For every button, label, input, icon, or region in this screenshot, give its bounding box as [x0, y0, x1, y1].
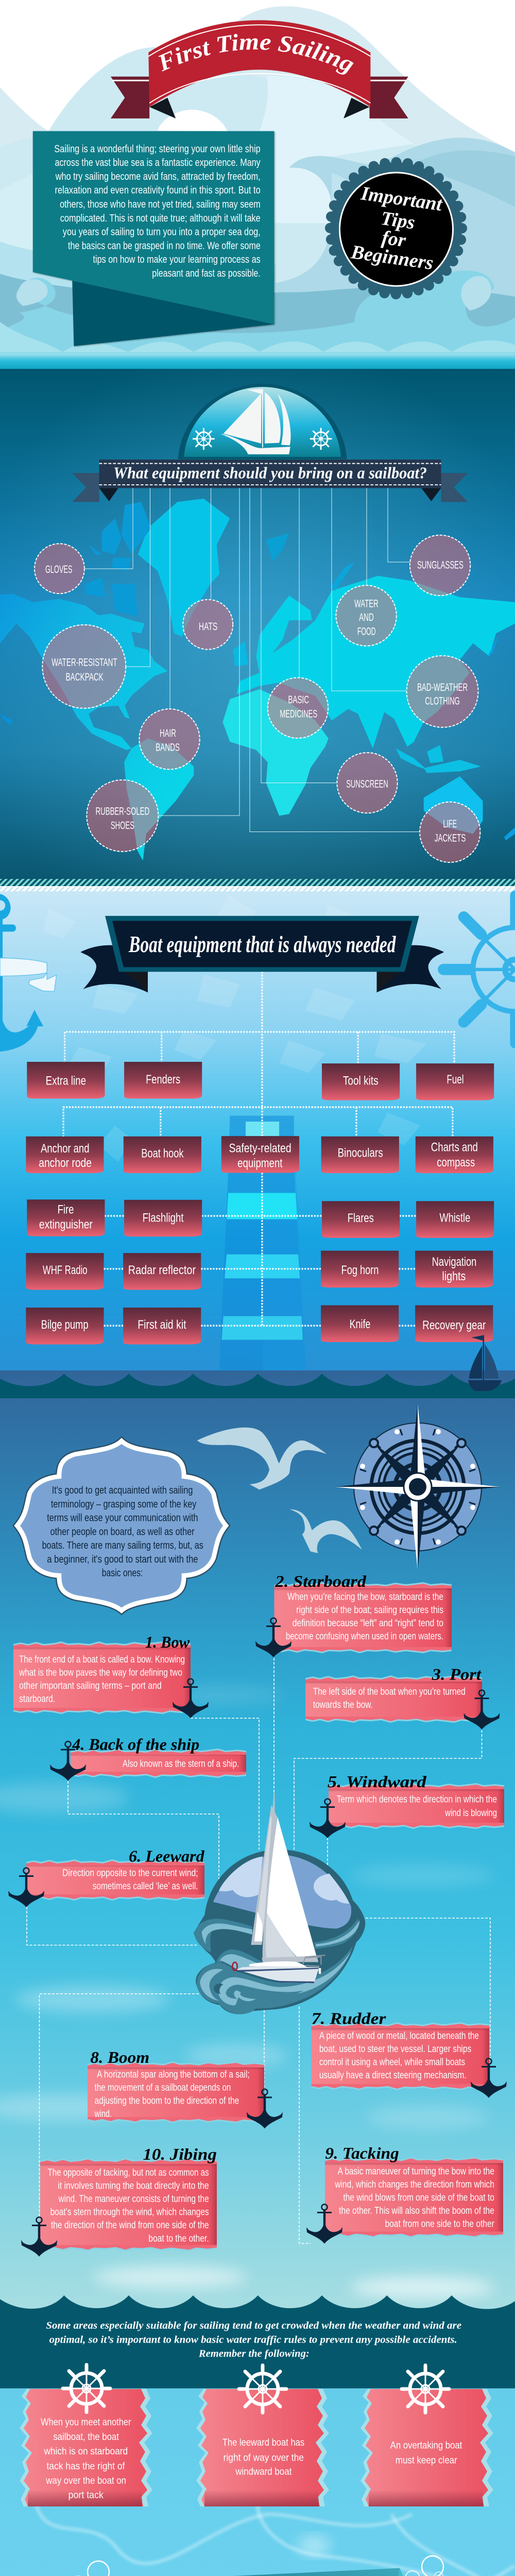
box: boat hook [124, 1137, 201, 1173]
label: sunscreen [337, 753, 398, 813]
intro bubble: terminology: basic ones: [102, 1568, 143, 1579]
connector lines [84, 488, 419, 832]
term card 10: jibing: it involves turning the boat directly into the [58, 2181, 209, 2192]
label: water-resistant backpack: BACKPACK [66, 670, 104, 683]
label: rubber-soled shoes [87, 780, 158, 852]
box: binoculars [321, 1137, 399, 1173]
section background: hero waves [0, 0, 515, 369]
term card 7: rudder: boat, used to steer the vessel. Larger ships [319, 2044, 471, 2055]
term card 2: starboard: 2. Starboard [274, 1572, 367, 1590]
heading ribbon: what equipment: What equipment should you bring on a sailboat? [113, 464, 427, 482]
box: bilge pump [26, 1308, 104, 1344]
box: fog horn: Fog horn [341, 1263, 379, 1277]
term card 2: starboard: right side of the boat; sailing requires this [296, 1605, 443, 1616]
label: bad-weather clothing: CLOTHING [425, 694, 460, 707]
label: bad-weather clothing: BAD-WEATHER [417, 681, 468, 693]
scalloped band: rules header: Remember the following: [198, 2348, 310, 2360]
intro panel: Sailing is a wonderful thing; steering your own little ship [54, 143, 261, 155]
dashed connector lines: terminology [27, 1658, 490, 2243]
label: water-resistant backpack [42, 625, 126, 708]
label: water and food: AND [359, 611, 374, 623]
badge: important tips for beginners [330, 162, 462, 294]
intro bubble: terminology [17, 1441, 226, 1611]
label: sunglasses: SUNGLASSES [417, 558, 464, 571]
box: fenders: Fenders [146, 1073, 180, 1086]
intro bubble: terminology: boats. There are many sailing terms, but, as [42, 1540, 203, 1551]
badge: important tips for beginners: Beginners [349, 241, 435, 274]
label: rubber-soled shoes: RUBBER-SOLED [96, 804, 149, 817]
term card 8: boom: wind. [94, 2109, 112, 2120]
section background: boat equipment [0, 891, 515, 1386]
rule card 1: sailboat, the boat [53, 2431, 119, 2443]
rule card 3 [360, 2365, 493, 2506]
box: anchor and anchor rode [26, 1137, 104, 1173]
box: fog horn [321, 1251, 399, 1287]
label: life jackets: JACKETS [435, 832, 466, 844]
intro bubble: terminology: terminology – grasping some of the key [51, 1499, 197, 1510]
box: navigation lights: lights [442, 1269, 466, 1283]
term card 3: port: 3. Port [432, 1666, 482, 1684]
intro bubble: terminology: It's good to get acquainted with sailing [52, 1485, 193, 1496]
term card 6: leeward [8, 1848, 205, 1907]
intro panel: pleasant and fast as possible. [152, 268, 261, 279]
box: extra line: Extra line [46, 1074, 86, 1088]
label: hats [183, 600, 233, 650]
box: fuel: Fuel [447, 1073, 464, 1086]
rule card 1 [20, 2365, 152, 2506]
box: navigation lights: Navigation [432, 1255, 476, 1268]
box: whf radio: WHF Radio [43, 1263, 88, 1277]
rule card 1: tack has the right of [47, 2461, 125, 2472]
term card 2: starboard: definition because “left” and “right” tend to [293, 1618, 443, 1629]
term card 9: tacking: 9. Tacking [325, 2144, 399, 2162]
label: sunscreen: SUNSCREEN [346, 777, 388, 790]
rule card 3: An overtaking boat [390, 2440, 462, 2451]
label: gloves [35, 544, 84, 594]
heading ribbon: boat equipment: Boat equipment that is always needed [128, 931, 396, 957]
term card 5: windward [310, 1773, 504, 1838]
term card 7: rudder: usually have a direct steering mechanism. [319, 2070, 467, 2081]
rule card 1: port tack [68, 2489, 104, 2501]
term card 4: back of the ship: 4. Back of the ship [72, 1735, 199, 1753]
intro bubble: terminology: other people on board, as well as other [50, 1526, 195, 1537]
intro panel: complicated. This is not quite true; although it will take [60, 213, 261, 224]
box: first aid kit: First aid kit [138, 1318, 186, 1331]
term card 6: leeward: Direction opposite to the current wind; [62, 1868, 198, 1879]
term card 7: rudder: control it using a wheel, while small boats [319, 2057, 465, 2067]
intro panel: the basics can be grasped in no time. We offer some [68, 240, 261, 251]
intro panel: tips on how to make your learning process as [93, 254, 261, 265]
rule card 2: right of way over the [224, 2452, 304, 2463]
scalloped band: rules header: Some areas especially suitable for sailing tend to get crowded when the weather and wind are [46, 2320, 461, 2331]
rule card 1: which is on starboard [44, 2446, 128, 2457]
term card 4: back of the ship [50, 1735, 246, 1781]
box: knife [321, 1306, 399, 1342]
equipment boxes [26, 1062, 494, 1344]
box: boat hook: Boat hook [141, 1147, 184, 1160]
box: fire extinguisher: Fire [58, 1203, 74, 1216]
term card 10: jibing: The opposite of tacking, but not as common as [47, 2167, 209, 2178]
term card 1: bow: other important sailing terms – port and [19, 1681, 162, 1691]
box: anchor and anchor rode: Anchor and [41, 1142, 89, 1155]
label: rubber-soled shoes: SHOES [111, 819, 134, 832]
badge: important tips for beginners: Important [359, 182, 444, 215]
label: bad-weather clothing [407, 656, 478, 727]
box: flares: Flares [348, 1211, 374, 1225]
closing origami banner [13, 2568, 479, 2576]
box: fire extinguisher [27, 1199, 105, 1236]
term card 1: bow: what is the bow paves the way for defining two [19, 1667, 182, 1678]
section background: equipment map [0, 369, 515, 880]
term card 10: jibing: boat’s stern through the wind, which changes [50, 2207, 209, 2218]
box: anchor and anchor rode: anchor rode [39, 1156, 92, 1170]
term card 2: starboard: When you’re facing the bow, starboard is the [287, 1592, 443, 1603]
box: extra line [27, 1062, 105, 1098]
world map [0, 499, 515, 861]
label: life jackets: LIFE [443, 817, 457, 830]
label: hats: HATS [199, 620, 217, 633]
term card 10: jibing: 10. Jibing [143, 2145, 217, 2163]
box: whistle: Whistle [439, 1211, 470, 1225]
rule card 3: must keep clear [396, 2454, 457, 2466]
term card 10: jibing: boat to the other. [148, 2233, 209, 2244]
box: charts and compass: Charts and [431, 1140, 478, 1154]
term card 1: bow: starboard. [19, 1693, 55, 1704]
box: first aid kit [123, 1308, 201, 1344]
term card 7: rudder: A piece of wood or metal, located beneath the [319, 2030, 479, 2041]
term card 9: tacking [306, 2144, 503, 2244]
term card 8: boom: A horizontal spar along the bottom of a sail; [97, 2070, 250, 2080]
term card 3: port: The left side of the boat when you’re turned [313, 1686, 466, 1697]
term card 8: boom: adjusting the boom to the direction of the [95, 2096, 239, 2107]
label: hair bands: BANDS [156, 741, 180, 754]
label: life jackets [420, 802, 480, 862]
box: charts and compass [416, 1137, 493, 1173]
icon: seagulls [197, 1428, 362, 1553]
box: recovery gear [415, 1306, 493, 1342]
label: basic medicines [268, 677, 328, 738]
box: safety-related equipment [221, 1136, 299, 1173]
hatched divider [0, 879, 515, 891]
label: water-resistant backpack: WATER-RESISTANT [52, 655, 117, 668]
label: basic medicines: BASIC [288, 693, 309, 706]
section background: water [0, 2388, 515, 2576]
label: basic medicines: MEDICINES [280, 707, 317, 720]
title ribbon: First Time Sailing [111, 20, 408, 118]
box: binoculars: Binoculars [338, 1146, 383, 1159]
intro bubble: terminology: terms will ease your communication with [47, 1513, 198, 1524]
title ribbon: First Time Sailing: First Time Sailing [159, 34, 354, 75]
rule card 1: When you meet another [41, 2416, 131, 2428]
rule card 1: way over the boat on [45, 2475, 126, 2486]
intro panel: others, those who have not yet tried, sailing may seem [60, 199, 261, 210]
label: water and food: FOOD [357, 625, 376, 638]
scalloped band: rules header: optimal, so it’s important to know basic water traffic rules to prevent any possible accidents. [49, 2334, 457, 2345]
box: tool kits: Tool kits [343, 1074, 379, 1088]
term card 5: windward: wind is blowing [444, 1808, 497, 1819]
term card 1: bow: 1. Bow [145, 1633, 190, 1651]
term card 7: rudder [311, 2010, 507, 2098]
heading ribbon: what equipment [72, 460, 468, 502]
background icon: anchor with scroll [0, 894, 57, 1052]
box: navigation lights [415, 1251, 493, 1287]
dome icon: sailing ship [178, 384, 347, 459]
label: water and food [336, 585, 397, 646]
term card 4: back of the ship: Also known as the stern of a ship. [123, 1759, 239, 1770]
illustration: sailboat in globe [194, 1793, 365, 2014]
intro bubble: terminology: a beginner, it's good to start out with the [47, 1554, 198, 1565]
intro panel [33, 131, 274, 346]
term card 6: leeward: sometimes called ‘lee’ as well. [93, 1881, 198, 1892]
intro panel: across the vast blue sea is a fantastic experience. Many [55, 157, 261, 168]
bubbles cluster left [61, 2561, 109, 2576]
intro panel: you years of sailing to turn you into a proper sea dog, [63, 227, 261, 238]
term card 3: port: towards the bow. [313, 1700, 373, 1710]
term card 1: bow [13, 1633, 209, 1718]
box: knife: Knife [350, 1317, 370, 1331]
box: radar reflector: Radar reflector [128, 1263, 196, 1277]
box: fenders [124, 1062, 202, 1098]
term card 8: boom [88, 2048, 283, 2129]
box: recovery gear: Recovery gear [422, 1318, 486, 1332]
rule card 2: windward boat [235, 2466, 292, 2478]
section background: terminology sky [0, 1370, 515, 2313]
box: safety-related equipment: equipment [237, 1157, 283, 1170]
term card 8: boom: 8. Boom [90, 2048, 149, 2066]
scalloped band top [0, 1374, 515, 1398]
term card 10: jibing: the direction of the wind from one side of the [51, 2220, 209, 2231]
box: flares [322, 1201, 400, 1238]
intro panel: relaxation and even creativity found in this sport. But to [55, 185, 261, 196]
box: bilge pump: Bilge pump [41, 1318, 89, 1331]
box: whf radio [26, 1253, 104, 1290]
label: hair bands [139, 709, 200, 769]
rule card 2: The leeward boat has [222, 2437, 304, 2448]
icon: small navy boat [468, 1335, 502, 1391]
box: flashlight [124, 1200, 202, 1236]
icon: compass [332, 1401, 504, 1573]
box: tool kits [322, 1063, 400, 1100]
scalloped band: rules header [0, 2295, 515, 2388]
label: water and food: WATER [354, 597, 379, 609]
box: fuel [416, 1063, 494, 1100]
box: fire extinguisher: extinguisher [39, 1217, 93, 1231]
term card 7: rudder: 7. Rudder [312, 2010, 386, 2028]
term card 2: starboard [255, 1572, 452, 1657]
term card 5: windward: 5. Windward [328, 1773, 427, 1791]
label: sunglasses [410, 535, 470, 596]
box: radar reflector [123, 1253, 201, 1290]
term card 10: jibing: wind. The maneuver consists of turning the [58, 2194, 209, 2205]
label: gloves: GLOVES [45, 563, 72, 575]
background icon: ship wheel [443, 895, 515, 1043]
intro panel: who try sailing become avid fans, attracted by freedom, [55, 171, 261, 182]
badge: important tips for beginners: for [381, 227, 408, 251]
box: charts and compass: compass [437, 1156, 475, 1169]
dotted connector tree [63, 972, 454, 1326]
term card 8: boom: the movement of a sailboat depends on [95, 2082, 231, 2093]
rule card 2 [196, 2365, 329, 2506]
term card 2: starboard: become confusing when used in open waters. [286, 1631, 443, 1642]
background: lighthouse [218, 1116, 307, 1388]
term card 6: leeward: 6. Leeward [129, 1848, 205, 1866]
bubbles cluster right [396, 2556, 443, 2576]
heading ribbon: boat equipment [80, 916, 444, 992]
term card 1: bow: The front end of a boat is called a bow. Knowing [19, 1654, 185, 1665]
circle labels [35, 535, 480, 862]
label: hair bands: HAIR [160, 726, 176, 739]
box: flashlight: Flashlight [143, 1211, 184, 1225]
box: whistle [416, 1201, 494, 1238]
term card 10: jibing [21, 2145, 217, 2257]
term card 3: port [305, 1666, 500, 1730]
badge: important tips for beginners: Tips [380, 208, 416, 234]
box: safety-related equipment: Safety-related [229, 1141, 291, 1155]
